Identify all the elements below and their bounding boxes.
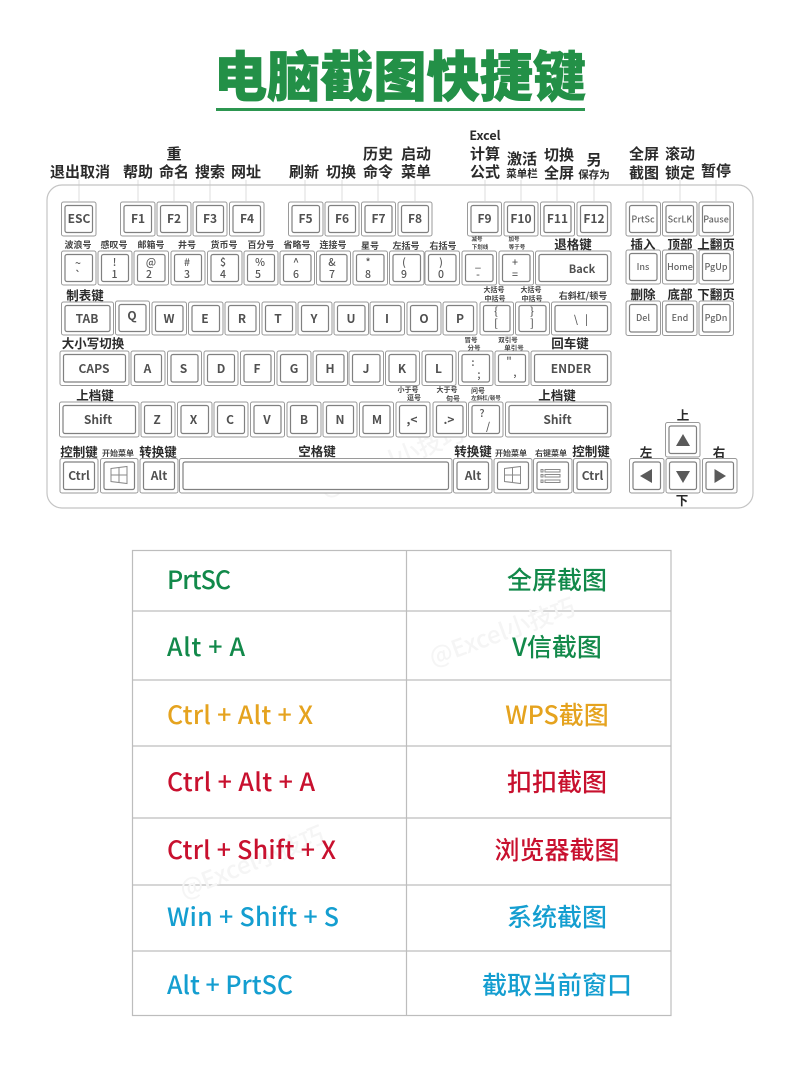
row: Ctrl + Shift + X: 浏览器截图 — [494, 831, 620, 867]
shift key row: ,< — [407, 411, 417, 428]
top function labels: 截图 — [629, 162, 659, 183]
shift key row: V — [262, 411, 271, 428]
top function labels: 全屏 — [629, 143, 659, 164]
number row labels: 下划线 — [472, 243, 489, 251]
top function labels: 暂停 — [701, 160, 731, 181]
QWERTY row labels: 底部 — [667, 284, 693, 303]
number row labels: 退格键 — [554, 234, 592, 253]
function key row: F4 — [240, 210, 254, 227]
top function labels: 滚动 — [665, 143, 695, 164]
number row labels: 省略号 — [283, 238, 311, 251]
QWERTY key row: { — [494, 304, 498, 319]
row: Ctrl + Shift + X — [167, 831, 620, 867]
QWERTY key row — [62, 301, 734, 336]
number key row: Home — [667, 260, 693, 273]
top function labels: 切换 — [544, 144, 574, 165]
function key row: Pause — [703, 212, 729, 226]
home row labels: 双引号 — [498, 334, 518, 344]
home key row: J — [363, 360, 369, 377]
arrow keys: 左 — [640, 442, 652, 461]
number key row: ~ — [75, 256, 81, 271]
shift key row: Shift — [543, 411, 572, 428]
number key row: ) — [439, 255, 443, 270]
home row labels: 冒号 — [464, 334, 478, 344]
function key row — [62, 202, 734, 236]
function key row: F7 — [371, 210, 386, 227]
shift key row: / — [486, 419, 490, 434]
top function labels: 另 — [586, 149, 602, 170]
home key row: : — [471, 355, 475, 370]
number key row: 8 — [365, 267, 371, 282]
arrow keys: 下 — [676, 490, 688, 509]
QWERTY row labels: 中括号 — [522, 294, 542, 304]
top function labels — [50, 125, 731, 201]
number key row: % — [255, 255, 265, 270]
function key row: F1 — [131, 210, 145, 227]
number row labels: 星号 — [361, 239, 379, 252]
function key row: F9 — [477, 210, 492, 227]
number key row: 3 — [184, 267, 190, 282]
bottom key row — [60, 458, 611, 493]
bottom row labels: 转换键 — [139, 442, 177, 460]
QWERTY row labels: 制表键 — [66, 285, 104, 304]
shift row labels: 上档键 — [76, 385, 114, 404]
QWERTY row labels: 大括号 — [520, 285, 542, 295]
number key row: 4 — [220, 267, 226, 282]
row: Ctrl + Alt + A: 扣扣截图 — [507, 763, 607, 799]
top function labels: Excel — [469, 125, 501, 144]
top function labels: 命名 — [159, 161, 189, 182]
row: Alt + PrtSC — [167, 966, 632, 1002]
QWERTY key row: I — [385, 310, 389, 327]
function key row: F6 — [335, 210, 349, 227]
bottom row labels: 开始菜单 — [495, 448, 527, 459]
QWERTY key row: Del — [636, 311, 650, 324]
row: Ctrl + Alt + X: WPS截图 — [505, 696, 609, 732]
number key row: 5 — [255, 267, 261, 282]
function key row: ScrLK — [668, 212, 692, 226]
QWERTY row labels: 中括号 — [484, 294, 506, 304]
number key row: 0 — [438, 267, 444, 282]
number row labels — [64, 234, 735, 253]
shift key row: C — [226, 411, 234, 428]
shortcut table: @Excel小技巧 — [423, 587, 579, 673]
home row labels — [62, 333, 589, 352]
shift row labels: 上档键 — [538, 385, 576, 404]
number row labels: 减号 — [471, 235, 483, 243]
number row labels: 左括号 — [392, 239, 420, 252]
shift key row: Shift — [84, 411, 112, 428]
home key row: S — [180, 360, 187, 377]
bottom row labels: 转换键 — [454, 441, 492, 460]
bottom key row: Alt — [150, 467, 167, 484]
home row labels: 分号 — [468, 342, 481, 352]
number key row: ! — [113, 255, 116, 270]
home key row: CAPS — [79, 360, 109, 377]
arrow keys — [630, 405, 737, 509]
number key row: 9 — [401, 267, 407, 282]
number key row: + — [512, 255, 518, 270]
top function labels: 刷新 — [289, 161, 319, 182]
home key row: F — [253, 360, 261, 377]
home key row: " — [506, 355, 512, 370]
shift key row: X — [190, 411, 198, 428]
home row labels: 单引号 — [504, 342, 524, 352]
function key row: F3 — [203, 210, 217, 227]
home key row: L — [435, 360, 442, 377]
function key row: F5 — [298, 210, 313, 227]
shift key row — [60, 402, 611, 437]
function key row: PrtSc — [631, 212, 655, 226]
QWERTY key row: [ — [494, 316, 498, 331]
bottom key row: Alt — [464, 467, 481, 484]
top function labels: 重 — [166, 143, 182, 164]
top function labels: 激活 — [507, 148, 537, 169]
number row labels: 右括号 — [429, 239, 457, 252]
top function labels: 命令 — [363, 161, 393, 182]
QWERTY key row: U — [347, 310, 355, 327]
number key row: & — [328, 255, 336, 270]
shortcut table — [132, 550, 671, 1016]
home key row: ; — [477, 367, 481, 382]
row: Win + Shift + S: 系统截图 — [507, 898, 607, 934]
arrow keys: 右 — [713, 442, 725, 461]
home key row: D — [217, 360, 225, 377]
top function labels: 锁定 — [665, 162, 695, 183]
bottom row labels: 控制键 — [60, 442, 98, 460]
shift row labels — [76, 385, 576, 404]
QWERTY key row: P — [456, 310, 464, 327]
shortcut table: @Excel小技巧 — [173, 815, 329, 905]
row: Alt + A: Alt + A — [167, 628, 245, 664]
arrow keys: 上 — [677, 405, 689, 424]
QWERTY row labels: 右斜杠/顿号 — [559, 289, 607, 302]
number key row — [62, 250, 734, 285]
top function labels: 保存为 — [578, 167, 610, 182]
row: Win + Shift + S — [167, 898, 607, 934]
number row labels: 连接号 — [319, 238, 347, 251]
row: Win + Shift + S: Win + Shift + S — [167, 898, 339, 934]
row: Alt + PrtSC: Alt + PrtSC — [167, 966, 293, 1002]
top function labels: 网址 — [231, 161, 261, 182]
QWERTY row labels: 下翻页 — [697, 284, 735, 303]
number key row: Ins — [637, 260, 649, 273]
home key row: H — [325, 360, 335, 377]
number row labels: 上翻页 — [697, 234, 735, 253]
QWERTY key row: } — [530, 304, 534, 319]
shift key row: .> — [444, 411, 454, 428]
number key row: 7 — [329, 267, 335, 282]
row: PrtSC: 全屏截图 — [507, 561, 607, 597]
QWERTY key row: Y — [310, 310, 319, 327]
number row labels: 百分号 — [247, 238, 275, 251]
top function labels: 切换 — [326, 161, 356, 182]
QWERTY key row: \ | — [574, 312, 588, 327]
watermark on keyboard: @Excel小技巧 — [313, 413, 469, 503]
top function labels: 帮助 — [123, 161, 153, 182]
shift row labels: 问号 — [471, 386, 485, 396]
bottom row labels: 空格键 — [298, 441, 336, 460]
home key row: G — [290, 360, 298, 377]
home key row: ENDER — [551, 360, 591, 377]
top function labels: 搜索 — [195, 161, 225, 182]
shift key row: ? — [479, 406, 485, 421]
top function labels: 菜单栏 — [506, 166, 538, 181]
number row labels: 井号 — [178, 238, 196, 251]
shift row labels: 逗号 — [407, 393, 421, 403]
QWERTY key row: O — [419, 310, 429, 327]
number row labels: 等于号 — [509, 243, 526, 251]
top function labels: 全屏 — [544, 162, 574, 183]
home key row: K — [398, 360, 407, 377]
number key row: # — [184, 255, 190, 270]
top function labels: 启动 — [401, 143, 431, 164]
QWERTY key row: End — [672, 311, 688, 324]
QWERTY key row: ] — [530, 316, 534, 331]
number row labels: 邮箱号 — [137, 238, 165, 251]
bottom row labels — [60, 441, 610, 460]
shift row labels: 小于号 — [398, 385, 418, 395]
number key row: 6 — [293, 267, 299, 282]
row: PrtSC: PrtSC — [167, 561, 231, 597]
number key row: 1 — [112, 267, 118, 282]
shift key row: Z — [153, 411, 161, 428]
shift key row: M — [372, 411, 382, 428]
QWERTY key row: W — [164, 310, 175, 327]
QWERTY key row: T — [274, 310, 282, 327]
home key row: A — [143, 360, 152, 377]
bottom row labels: 控制键 — [572, 441, 610, 460]
number row labels: 加号 — [508, 235, 520, 243]
row: Alt + A — [167, 628, 602, 664]
number row labels: 插入 — [630, 234, 656, 253]
top function labels: 公式 — [470, 161, 500, 182]
top function labels: 计算 — [470, 143, 500, 164]
number key row: 2 — [146, 267, 152, 282]
bottom row labels: 右键菜单 — [535, 448, 567, 459]
row: Ctrl + Shift + X: Ctrl + Shift + X — [167, 831, 336, 867]
top function labels: 菜单 — [401, 161, 431, 182]
QWERTY key row: TAB — [76, 310, 98, 327]
row: Alt + A: V信截图 — [511, 628, 602, 664]
function key row: F11 — [547, 210, 568, 227]
function key row: F12 — [583, 210, 605, 227]
number key row: ( — [402, 255, 406, 270]
row: Ctrl + Alt + A — [167, 763, 607, 799]
number row labels: 波浪号 — [64, 238, 92, 251]
top function labels: 退出取消 — [50, 161, 110, 182]
number key row: = — [512, 267, 518, 282]
number key row: Back — [569, 261, 596, 277]
number key row: PgUp — [704, 260, 728, 273]
row: PrtSC — [167, 561, 607, 597]
shift key row: B — [300, 411, 308, 428]
number row labels: 货币号 — [210, 238, 238, 251]
shift row labels: 大于号 — [436, 385, 458, 395]
title: 电脑截图快捷键 — [214, 33, 586, 112]
QWERTY key row: PgDn — [705, 311, 727, 324]
QWERTY key row: Q — [127, 307, 137, 324]
bottom row labels: 开始菜单 — [102, 448, 134, 459]
shift row labels: 左斜杠/顿号 — [471, 394, 501, 402]
QWERTY row labels — [66, 284, 735, 304]
home key row — [60, 351, 611, 386]
function key row: F10 — [510, 210, 532, 227]
QWERTY key row: E — [201, 310, 209, 327]
home key row: , — [513, 365, 517, 380]
number row labels: 感叹号 — [100, 238, 128, 251]
row: Alt + PrtSC: 截取当前窗口 — [482, 966, 632, 1002]
bottom key row: Ctrl — [582, 467, 603, 484]
home row labels: 回车键 — [551, 333, 589, 352]
number key row: * — [365, 255, 371, 270]
bottom key row: Ctrl — [68, 467, 90, 484]
top function labels: 历史 — [363, 143, 393, 164]
function key row: ESC — [68, 210, 90, 227]
keyboard body — [47, 185, 753, 508]
number key row: ^ — [293, 255, 299, 270]
number key row: ` — [75, 268, 81, 283]
QWERTY row labels: 大括号 — [484, 285, 504, 295]
number key row: @ — [146, 255, 156, 270]
QWERTY row labels: 删除 — [630, 284, 656, 303]
QWERTY key row: R — [238, 310, 246, 327]
home row labels: 大小写切换 — [62, 333, 125, 352]
function key row: F8 — [408, 210, 422, 227]
row: Ctrl + Alt + X — [167, 696, 609, 732]
number key row: _ — [475, 256, 481, 271]
number key row: $ — [220, 255, 226, 270]
number key row: - — [476, 267, 480, 282]
row: Ctrl + Alt + X: Ctrl + Alt + X — [167, 696, 313, 732]
row: Ctrl + Alt + A: Ctrl + Alt + A — [167, 763, 315, 799]
shift key row: N — [336, 411, 344, 428]
function key row: F2 — [167, 210, 181, 227]
shift row labels: 句号 — [446, 394, 460, 404]
number row labels: 顶部 — [667, 234, 693, 253]
